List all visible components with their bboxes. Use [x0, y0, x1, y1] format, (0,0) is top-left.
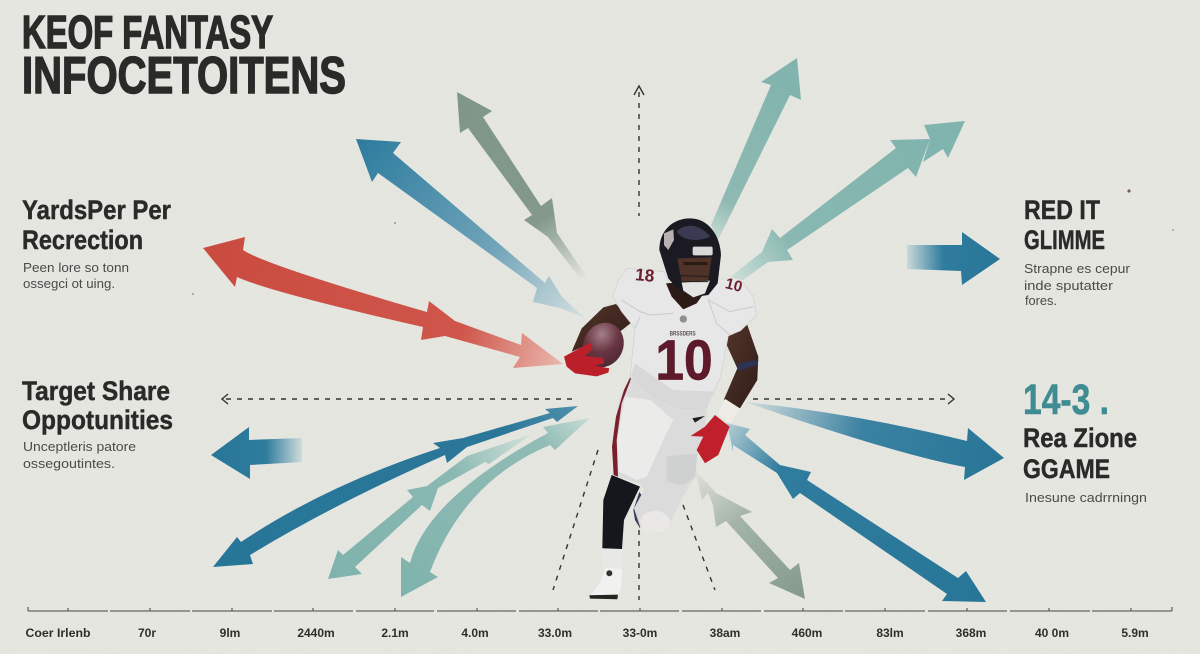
jersey shade	[631, 363, 715, 408]
jersey wordmark: BRSSDERS	[670, 331, 696, 338]
right glove	[691, 415, 730, 463]
ruler labels: 70r	[138, 626, 156, 640]
ruler labels: 33.0m	[538, 626, 572, 640]
text block: red it game: RED IT	[1024, 195, 1100, 225]
text block: target share opportunities: Oppotunities	[22, 405, 173, 435]
text block: target share opportunities: Target Share	[22, 376, 170, 406]
title: KEOF FANTASY	[22, 6, 273, 58]
ruler labels: 2.1m	[381, 626, 409, 640]
face	[677, 257, 712, 287]
arrow: teal lower	[401, 418, 590, 597]
left arm	[572, 304, 633, 352]
left thigh highlight	[617, 397, 673, 480]
arrow: olive lower right	[695, 470, 805, 599]
jersey number: 10	[655, 329, 713, 392]
right shoulder number: 10	[723, 275, 744, 296]
arrow: red	[203, 237, 563, 368]
collar logo	[680, 315, 687, 323]
arrow: blue lower right long	[745, 402, 1004, 480]
arrow: blue left small	[211, 427, 302, 479]
mask bars	[673, 275, 713, 282]
ruler labels: 33-0m	[623, 626, 657, 640]
wrist tape	[718, 399, 740, 424]
text block: target share opportunities	[22, 376, 173, 471]
ruler line	[28, 607, 1172, 611]
text block: red zone game	[1023, 376, 1147, 505]
player shoe	[589, 568, 622, 599]
football	[576, 316, 631, 374]
text block: red it game: GLIMME	[1024, 225, 1105, 255]
arrow: blue upper left	[356, 139, 585, 318]
ruler labels: 368m	[956, 626, 986, 640]
helmet	[659, 218, 721, 297]
title	[22, 6, 346, 105]
arrow: olive top	[457, 92, 587, 278]
arm band	[737, 360, 758, 371]
jersey	[613, 268, 757, 409]
right thigh pad	[667, 453, 697, 485]
nike mark	[692, 416, 705, 423]
helmet logo	[664, 229, 674, 250]
title: INFOCETOITENS	[22, 47, 346, 105]
arrow: blue right small	[907, 232, 1000, 285]
dashed guide lines	[222, 86, 954, 600]
ruler labels	[26, 626, 1149, 640]
left shoulder number: 18	[634, 264, 656, 286]
ruler labels: 38am	[710, 626, 740, 640]
ruler labels: 460m	[792, 626, 822, 640]
knee	[640, 511, 670, 533]
ruler labels: 83lm	[876, 626, 904, 640]
eye shadow	[683, 262, 707, 265]
arrow: teal middle	[328, 434, 532, 579]
text block: red zone game: GGAME	[1023, 454, 1110, 484]
arrow: blue lower right diagonal	[727, 423, 986, 602]
text block: target share opportunities: ossegoutintes.	[23, 457, 115, 471]
text block: target share opportunities: Unceptleris patore	[23, 440, 136, 454]
left glove	[564, 343, 609, 376]
text block: red it game: fores.	[1025, 294, 1057, 308]
arrow: teal top right	[711, 58, 801, 240]
ruler labels: 5.9m	[1121, 626, 1149, 640]
player sock	[601, 549, 623, 569]
player pants	[613, 372, 707, 534]
text block: yards per reception: Recrection	[22, 225, 143, 255]
arrow: teal right	[730, 121, 965, 280]
text block: red it game	[1024, 195, 1130, 308]
yardage ruler	[26, 607, 1172, 640]
text block: yards per reception: Peen lore so tonn	[23, 261, 129, 275]
text block: red it game: Strapne es cepur	[1024, 262, 1130, 276]
facemask	[682, 281, 710, 297]
text block: yards per reception: ossegci ot uing.	[23, 277, 115, 291]
jersey seams	[622, 300, 753, 335]
ruler labels: 2440m	[297, 626, 335, 640]
text block: yards per reception: YardsPer Per	[22, 195, 171, 225]
pants stripe	[612, 371, 633, 477]
player rear foot	[633, 492, 643, 528]
visor shine	[677, 226, 710, 240]
ruler labels: Coer Irlenb	[26, 626, 90, 640]
helmet bumper	[693, 247, 713, 255]
text block: red zone game: Rea Zione	[1023, 423, 1137, 453]
arrow: blue lower left long	[213, 406, 578, 567]
right arm	[724, 325, 758, 408]
text block: yards per reception	[22, 195, 171, 291]
player back leg	[602, 475, 640, 549]
neck	[666, 280, 713, 309]
ruler labels: 9lm	[220, 626, 240, 640]
ruler labels: 4.0m	[461, 626, 489, 640]
text block: red zone game: 14-3 .	[1023, 376, 1109, 424]
player	[564, 218, 758, 599]
text block: red it game: inde sputatter	[1024, 279, 1113, 293]
ruler labels: 40 0m	[1035, 626, 1069, 640]
text block: red zone game: Inesune cadrrningn	[1025, 491, 1147, 505]
